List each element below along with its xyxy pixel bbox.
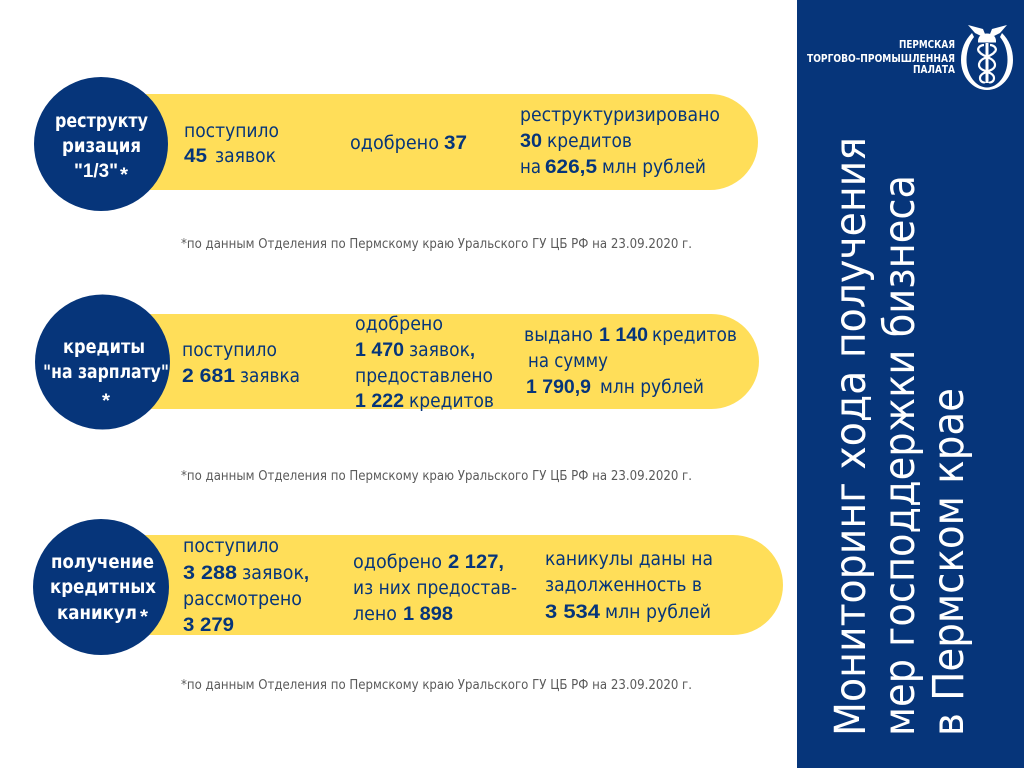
circle badge: [34, 77, 168, 211]
circle badge: [35, 294, 170, 430]
title: Мониторинг хода получения: [826, 137, 876, 736]
received text: 3 288: [183, 563, 237, 584]
footnote 2: *по данным Отделения по Пермскому краю Уральского ГУ ЦБ РФ на 23.09.2020 г.: [181, 469, 692, 484]
received text: поступило: [184, 120, 279, 142]
restructured text: реструктуризировано: [520, 104, 720, 126]
restructured text: [520, 104, 720, 178]
holidays text: каникулы даны на: [545, 548, 713, 570]
circle badge: "1/3": [74, 161, 118, 182]
logo text: [807, 39, 956, 76]
logo text: ПЕРМСКАЯ: [899, 39, 955, 51]
approved text: кредитов: [409, 390, 494, 412]
approved text: из них предостав-: [353, 577, 517, 599]
issued text: на сумму: [528, 350, 608, 372]
approved text: 37: [444, 133, 467, 154]
received text: поступило: [182, 339, 277, 361]
holidays text: задолженность в: [545, 574, 702, 596]
restructured text: 30: [520, 131, 542, 152]
holidays text: млн рублей: [605, 601, 711, 623]
approved text: лено: [353, 603, 397, 625]
approved text: заявок: [409, 339, 470, 361]
received text: 45: [184, 146, 207, 167]
approved text: [355, 313, 494, 412]
approved text: предоставлено: [355, 365, 493, 387]
yellow pill: [130, 314, 759, 409]
approved text: [353, 551, 517, 625]
restructured text: 626,5: [545, 157, 597, 178]
circle badge: *: [102, 391, 111, 412]
approved text: 1 898: [403, 604, 453, 625]
circle badge: [33, 519, 169, 655]
logo: chamber of commerce: [807, 25, 1013, 90]
circle badge: ризация: [62, 135, 141, 157]
received text: [183, 535, 309, 636]
yellow pill: [130, 535, 783, 635]
circle badge: кредитных: [50, 576, 156, 598]
circle badge: реструкту: [55, 110, 149, 132]
received text: 2 681: [182, 366, 235, 387]
approved text: 1 470: [355, 340, 404, 361]
restructured text: на: [520, 156, 541, 178]
received text: ,: [304, 563, 309, 584]
issued text: кредитов: [652, 324, 737, 346]
footnote 3: *по данным Отделения по Пермскому краю Уральского ГУ ЦБ РФ на 23.09.2020 г.: [181, 678, 692, 693]
issued text: 1 790,9: [526, 377, 591, 398]
panel: salary loans row: [35, 294, 759, 430]
panel: restructuring row: [34, 77, 758, 211]
holidays text: [545, 548, 713, 623]
approved text: одобрено: [350, 132, 439, 154]
circle badge: каникул: [57, 602, 137, 624]
issued text: выдано: [524, 324, 593, 346]
issued text: млн рублей: [600, 376, 704, 398]
footnote 1: *по данным Отделения по Пермскому краю Уральского ГУ ЦБ РФ на 23.09.2020 г.: [181, 237, 692, 252]
title: в Пермском крае: [924, 388, 974, 736]
received text: 3 279: [183, 615, 234, 636]
received text: [182, 339, 300, 387]
panel: credit holidays row: [33, 519, 783, 655]
approved text: ,: [470, 340, 475, 361]
icon: horseshoe with winged helmet and caduceus: [961, 25, 1013, 90]
logo text: ТОРГОВО–ПРОМЫШЛЕННАЯ: [807, 53, 955, 65]
circle badge: кредиты: [63, 336, 145, 358]
panel: title sidebar: [797, 0, 1024, 768]
approved text: одобрено: [353, 551, 442, 573]
logo text: ПАЛАТА: [913, 64, 956, 76]
issued text: [524, 324, 737, 398]
title: мер господдержки бизнеса: [875, 175, 925, 736]
approved text: 1 222: [355, 391, 404, 412]
holidays text: 3 534: [545, 602, 601, 623]
received text: поступило: [183, 535, 279, 557]
title: [826, 137, 974, 736]
restructured text: млн рублей: [602, 156, 706, 178]
received text: заявок: [215, 145, 276, 167]
approved text: одобрено: [355, 313, 443, 335]
restructured text: кредитов: [547, 130, 632, 152]
received text: заявка: [240, 365, 300, 387]
circle badge: получение: [51, 551, 154, 573]
circle badge: *: [120, 165, 129, 186]
received text: заявок: [242, 562, 304, 584]
approved text: 2 127,: [448, 552, 504, 573]
yellow pill: [130, 94, 758, 190]
received text: рассмотрено: [183, 588, 302, 610]
issued text: 1 140: [599, 325, 648, 346]
circle badge: "на зарплату": [43, 361, 169, 383]
received text: [184, 120, 279, 167]
circle badge: *: [140, 607, 149, 628]
